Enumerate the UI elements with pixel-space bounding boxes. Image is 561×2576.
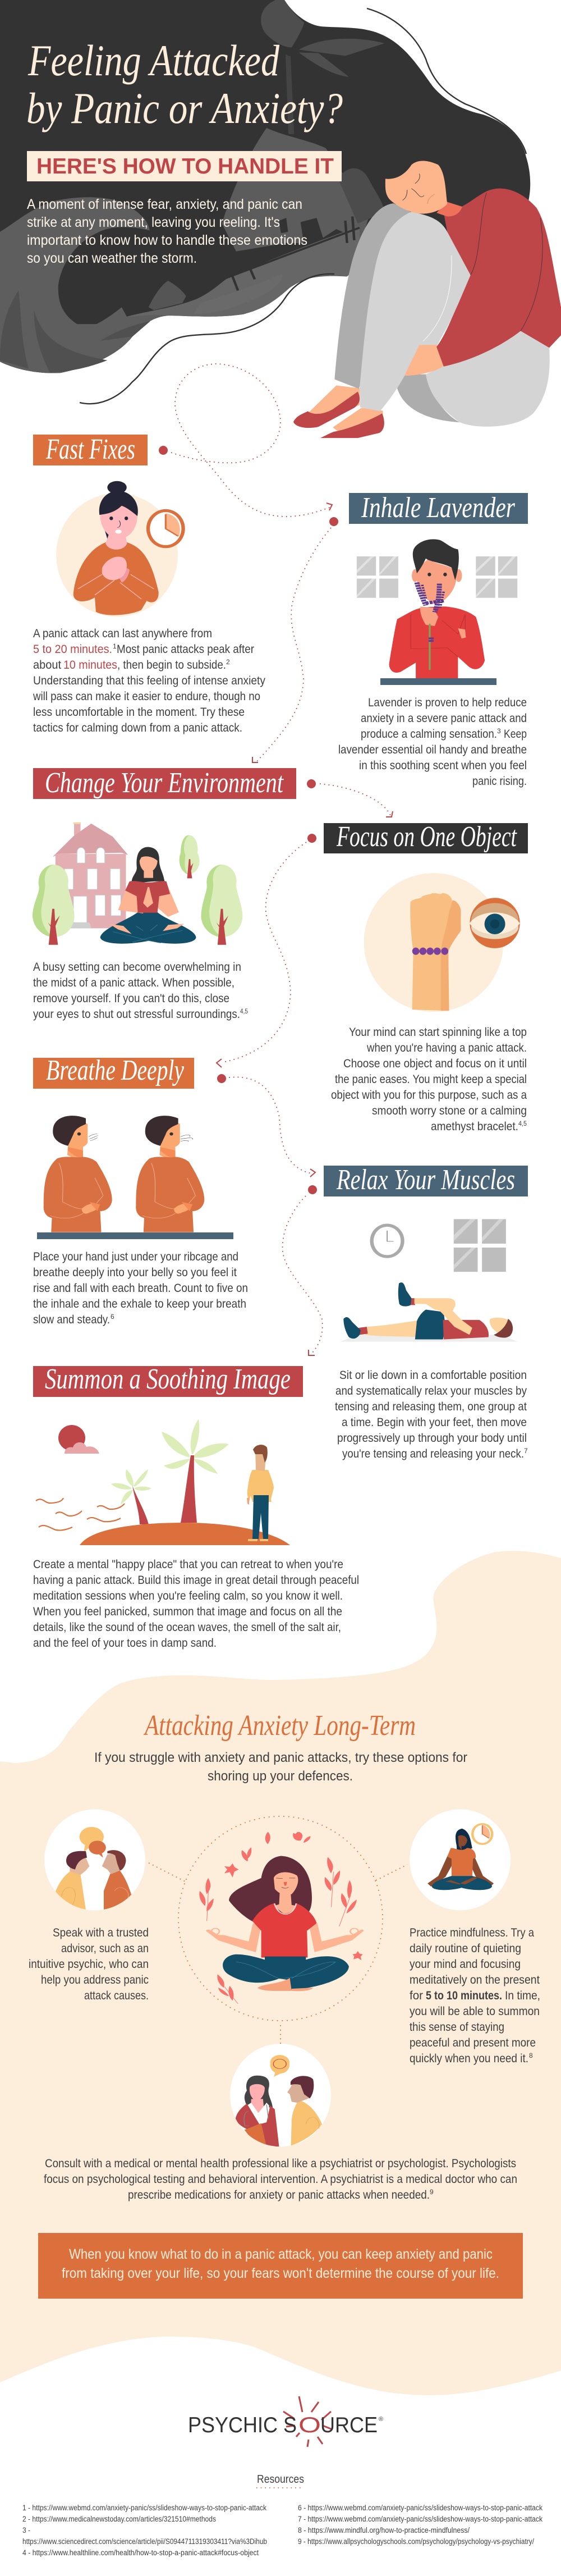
paragraph: focus object bbox=[331, 1026, 527, 1133]
paragraph: focus object: when you're having a panic attack. bbox=[366, 1042, 527, 1054]
dotted connector with arrow: Fast Fixes to Inhale Lavender bbox=[159, 364, 332, 517]
dotted connector with arrow: Relax to Summon bbox=[283, 1185, 323, 1355]
text: speak with advisor: advisor, such as an bbox=[61, 1942, 149, 1955]
paragraph: panic attack duration: 5 to 20 minutes. bbox=[33, 643, 112, 656]
paragraph: lavender: anxiety in a severe panic attack and bbox=[361, 712, 527, 725]
text: mindfulness: for bbox=[410, 1989, 423, 2002]
heading bar: Breathe Deeply: Breathe Deeply bbox=[46, 1054, 185, 1086]
circle: speak with advisor bbox=[44, 1809, 145, 1910]
paragraph: focus object: smooth worry stone or a calming bbox=[372, 1104, 527, 1117]
text: mindfulness: your mind and focusing bbox=[410, 1958, 521, 1971]
paragraph: breathing: breathe deeply into your belly so you feel it bbox=[33, 1266, 237, 1279]
paragraph: lavender: lavender essential oil handy and breathe bbox=[338, 743, 527, 756]
text: consult a professional: focus on psychological testing and behavioral intervention. A psychiatrist is a medical doctor who can bbox=[44, 2173, 517, 2186]
paragraph: panic attack duration: Most panic attacks peak after bbox=[117, 643, 254, 656]
paragraph: busy setting: 4,5 bbox=[240, 1007, 248, 1015]
resources list, left column: 2 - https://www.medicalnewstoday.com/articles/321510#methods bbox=[22, 2515, 216, 2523]
long-term intro text bbox=[94, 1750, 467, 1784]
window ledge bbox=[380, 678, 496, 685]
text: mindfulness: you will be able to summon bbox=[410, 2005, 540, 2018]
paragraph: focus object: 4,5 bbox=[518, 1120, 527, 1127]
text: speak with advisor: help you address panic bbox=[41, 1974, 149, 1986]
text: mindfulness: this sense of staying bbox=[410, 2021, 504, 2034]
paragraph: breathing: rise and fall with each breath. Count to five on bbox=[33, 1282, 248, 1295]
callout: closing message bbox=[38, 2233, 523, 2299]
paragraph: busy setting: A busy setting can become overwhelming in bbox=[33, 961, 241, 974]
paragraph: happy place: meditation sessions when you're feeling calm, so you know it well. bbox=[33, 1590, 343, 1602]
paragraph: lavender: produce a calming sensation. bbox=[361, 728, 497, 741]
paragraph: panic attack duration: , then begin to subside. bbox=[117, 659, 226, 672]
paragraph: relax muscles: and systematically relax your muscles by bbox=[335, 1385, 527, 1397]
dotted connector with arrow: Breathe to Relax bbox=[217, 1074, 315, 1177]
heading: Attacking Anxiety Long-Term: Attacking Anxiety Long-Term bbox=[144, 1710, 416, 1742]
resources heading: Resources bbox=[257, 2473, 304, 2486]
resources list, right column: 9 - https://www.allpsychologyschools.com/psychology/psychology-vs-psychiatry/ bbox=[298, 2537, 534, 2546]
logo: Psychic Source: O bbox=[298, 2413, 321, 2437]
logo: Psychic Source: URCE bbox=[320, 2413, 378, 2437]
paragraph: panic attack duration: A panic attack can last anywhere from bbox=[33, 627, 212, 640]
paragraph: busy setting: remove yourself. If you can't do this, close bbox=[33, 992, 229, 1005]
text: mindfulness: daily routine of quieting bbox=[410, 1942, 521, 1955]
paragraph: panic attack duration: Understanding that this feeling of intense anxiety bbox=[33, 674, 265, 687]
illustration: clock, window and man lying down stretching bbox=[340, 1219, 518, 1342]
intro paragraph: A moment of intense fear, anxiety, and panic can bbox=[27, 197, 302, 212]
paragraph: busy setting bbox=[33, 961, 248, 1021]
paragraph: breathing: Place your hand just under your ribcage and bbox=[33, 1250, 238, 1263]
central illustration: woman meditating with leaves bbox=[199, 1832, 364, 2004]
paragraph: panic attack duration: will pass can make it easier to endure, though no bbox=[33, 690, 260, 703]
heading bar: Fast Fixes: Fast Fixes bbox=[45, 433, 135, 465]
paragraph: happy place: details, like the sound of the ocean waves, the smell of the salt air, bbox=[33, 1621, 341, 1634]
resources list, left column: 1 - https://www.webmd.com/anxiety-panic/ss/slideshow-ways-to-stop-panic-attack bbox=[22, 2504, 266, 2512]
illustration: wrist with amethyst bracelet and eye bbox=[364, 873, 520, 1012]
paragraph: happy place: and the feel of your toes in damp sand. bbox=[33, 1637, 217, 1650]
illustration: anxious woman with clock bbox=[56, 481, 185, 617]
illustration: sad woman hugging knees bbox=[293, 161, 561, 438]
long-term intro text: shoring up your defences. bbox=[208, 1769, 353, 1784]
paragraph: relax muscles: progressively up through your body until bbox=[337, 1432, 527, 1445]
text: mindfulness: Practice mindfulness. Try a bbox=[410, 1926, 534, 1939]
intro paragraph: so you can weather the storm. bbox=[27, 250, 197, 266]
text: mindfulness: In time, bbox=[505, 1989, 540, 2002]
text: mindfulness bbox=[410, 1926, 540, 2065]
heading bar: Change Your Environment: Change Your Environment bbox=[45, 767, 284, 799]
paragraph: happy place bbox=[33, 1558, 359, 1650]
paragraph: focus object: object with you for this purpose, such as a bbox=[331, 1089, 527, 1102]
paragraph: busy setting: the midst of a panic attack. When possible, bbox=[33, 976, 234, 989]
paragraph: panic attack duration: tactics for calming down from a panic attack. bbox=[33, 721, 242, 734]
illustration: man breathing in and out bbox=[44, 1116, 204, 1232]
paragraph: panic attack duration: 2 bbox=[226, 658, 230, 666]
intro paragraph: strike at any moment, leaving you reeling. It's bbox=[27, 214, 280, 230]
paragraph: breathing bbox=[33, 1250, 248, 1326]
logo: Psychic Source bbox=[188, 2396, 383, 2447]
title bbox=[26, 36, 343, 133]
resources list, left column: https://www.sciencedirect.com/science/article/pii/S0944711319303411?via%3Dihub bbox=[22, 2537, 267, 2546]
resources list, left column: 4 - https://www.healthline.com/health/how-to-stop-a-panic-attack#focus-object bbox=[22, 2548, 259, 2557]
dotted connectors from ring to side circles bbox=[149, 1863, 407, 2044]
paragraph: lavender bbox=[338, 696, 527, 788]
heading bar: Summon a Soothing Image: Summon a Soothing Image bbox=[45, 1363, 291, 1395]
logo: Psychic Source: PSYCHIC S bbox=[188, 2413, 297, 2437]
text: mindfulness: 5 to 10 minutes. bbox=[426, 1989, 502, 2002]
dotted ring around central meditation figure bbox=[178, 1816, 383, 2021]
illustration: man smelling lavender at window bbox=[357, 539, 517, 679]
intro paragraph bbox=[27, 197, 307, 266]
text: speak with advisor: attack causes. bbox=[84, 1989, 149, 2002]
paragraph: relax muscles: Sit or lie down in a comfortable position bbox=[339, 1369, 527, 1382]
header: dark hair blob with storm scene bbox=[0, 0, 530, 373]
paragraph: lavender: Keep bbox=[504, 728, 527, 741]
resources list, right column bbox=[298, 2504, 542, 2546]
circle: mindfulness bbox=[410, 1809, 511, 1910]
text: mindfulness: 8 bbox=[529, 2052, 533, 2059]
illustration: woman meditating in front of house and trees bbox=[33, 822, 242, 945]
text: mindfulness: peaceful and present more bbox=[410, 2036, 536, 2049]
paragraph: lavender: in this soothing scent when you feel bbox=[359, 759, 527, 772]
paragraph: relax muscles: a time. Begin with your feet, then move bbox=[342, 1416, 527, 1429]
paragraph: relax muscles: 7 bbox=[524, 1447, 528, 1455]
counter ledge bbox=[37, 1232, 233, 1239]
paragraph: focus object: Choose one object and focus on it until bbox=[343, 1057, 527, 1070]
text: mindfulness: meditatively on the present bbox=[410, 1974, 540, 1986]
text: speak with advisor bbox=[29, 1926, 149, 2002]
paragraph: lavender: panic rising. bbox=[472, 775, 527, 788]
paragraph: happy place: having a panic attack. Build this image in great detail through peaceful bbox=[33, 1574, 359, 1587]
paragraph: breathing: 6 bbox=[111, 1313, 114, 1321]
resources list, left column: 3 - bbox=[22, 2526, 30, 2534]
circle: medical professional bbox=[230, 2044, 331, 2147]
paragraph: relax muscles bbox=[335, 1369, 528, 1460]
paragraph: relax muscles: you're tensing and releasing your neck. bbox=[342, 1447, 524, 1460]
paragraph: breathing: slow and steady. bbox=[33, 1313, 110, 1326]
text: consult a professional: Consult with a medical or mental health professional like a psychiatrist or psychologist. Psychologists bbox=[45, 2157, 516, 2170]
paragraph: panic attack duration: about bbox=[33, 659, 61, 672]
paragraph: focus object: the panic eases. You might keep a special bbox=[335, 1073, 527, 1086]
long-term intro text: If you struggle with anxiety and panic attacks, try these options for bbox=[94, 1750, 467, 1765]
title: by Panic or Anxiety? bbox=[26, 84, 343, 133]
dotted connector with arrow: Focus to Breathe bbox=[217, 834, 316, 1067]
resources list, right column: 8 - https://www.mindful.org/how-to-practice-mindfulness/ bbox=[298, 2526, 470, 2534]
text: speak with advisor: Speak with a trusted bbox=[53, 1926, 149, 1939]
paragraph: panic attack duration: less uncomfortable in the moment. Try these bbox=[33, 706, 245, 719]
text: consult a professional: 9 bbox=[430, 2188, 434, 2196]
paragraph: busy setting: your eyes to shut out stressful surroundings. bbox=[33, 1008, 240, 1021]
logo: Psychic Source: ® bbox=[379, 2416, 383, 2423]
paragraph: lavender: Lavender is proven to help reduce bbox=[368, 696, 527, 709]
paragraph: panic attack duration: 10 minutes bbox=[63, 659, 117, 672]
illustration: man on island with palm trees bbox=[36, 1419, 290, 1545]
decorative curved line, top right bbox=[367, 8, 526, 154]
paragraph: happy place: Create a mental "happy place" that you can retreat to when you're bbox=[33, 1558, 343, 1571]
resources list, left column bbox=[22, 2504, 267, 2557]
heading bar: Relax Your Muscles: Relax Your Muscles bbox=[336, 1164, 515, 1196]
paragraph: happy place: When you feel panicked, summon that image and focus on all the bbox=[33, 1605, 342, 1618]
paragraph: panic attack duration bbox=[33, 627, 265, 734]
heading bar: Inhale Lavender: Inhale Lavender bbox=[361, 492, 516, 524]
dotted connector with arrow: Change Your Environment to Focus bbox=[307, 779, 393, 817]
paragraph: lavender: 3 bbox=[497, 727, 501, 735]
paragraph: focus object: amethyst bracelet. bbox=[431, 1120, 518, 1133]
cream long-term section background bbox=[0, 1551, 561, 2395]
title: Feeling Attacked bbox=[27, 36, 280, 85]
paragraph: breathing: the inhale and the exhale to keep your breath bbox=[33, 1298, 246, 1310]
text: consult a professional: prescribe medications for anxiety or panic attacks when needed. bbox=[128, 2189, 430, 2202]
intro paragraph: important to know how to handle these emotions bbox=[27, 232, 307, 248]
dotted connector with arrow: Inhale Lavender to Change Your Environment bbox=[252, 517, 338, 762]
callout: closing message: When you know what to do in a panic attack, you can keep anxiety and panic bbox=[69, 2246, 493, 2262]
speech bubble with brain bbox=[270, 2057, 289, 2077]
callout: closing message: from taking over your life, so your fears won't determine the course of your life. bbox=[62, 2266, 499, 2281]
paragraph: panic attack duration: 1 bbox=[113, 642, 117, 650]
paragraph: relax muscles: tensing and releasing them, one group at bbox=[335, 1400, 527, 1413]
text: consult a professional bbox=[44, 2157, 517, 2202]
text: mindfulness: quickly when you need it. bbox=[410, 2052, 528, 2065]
decorative curved line, lower left bbox=[80, 274, 334, 404]
paragraph: focus object: Your mind can start spinning like a top bbox=[349, 1026, 527, 1039]
text: speak with advisor: intuitive psychic, who can bbox=[29, 1958, 149, 1971]
subtitle banner: HERE'S HOW TO HANDLE IT bbox=[36, 154, 334, 179]
